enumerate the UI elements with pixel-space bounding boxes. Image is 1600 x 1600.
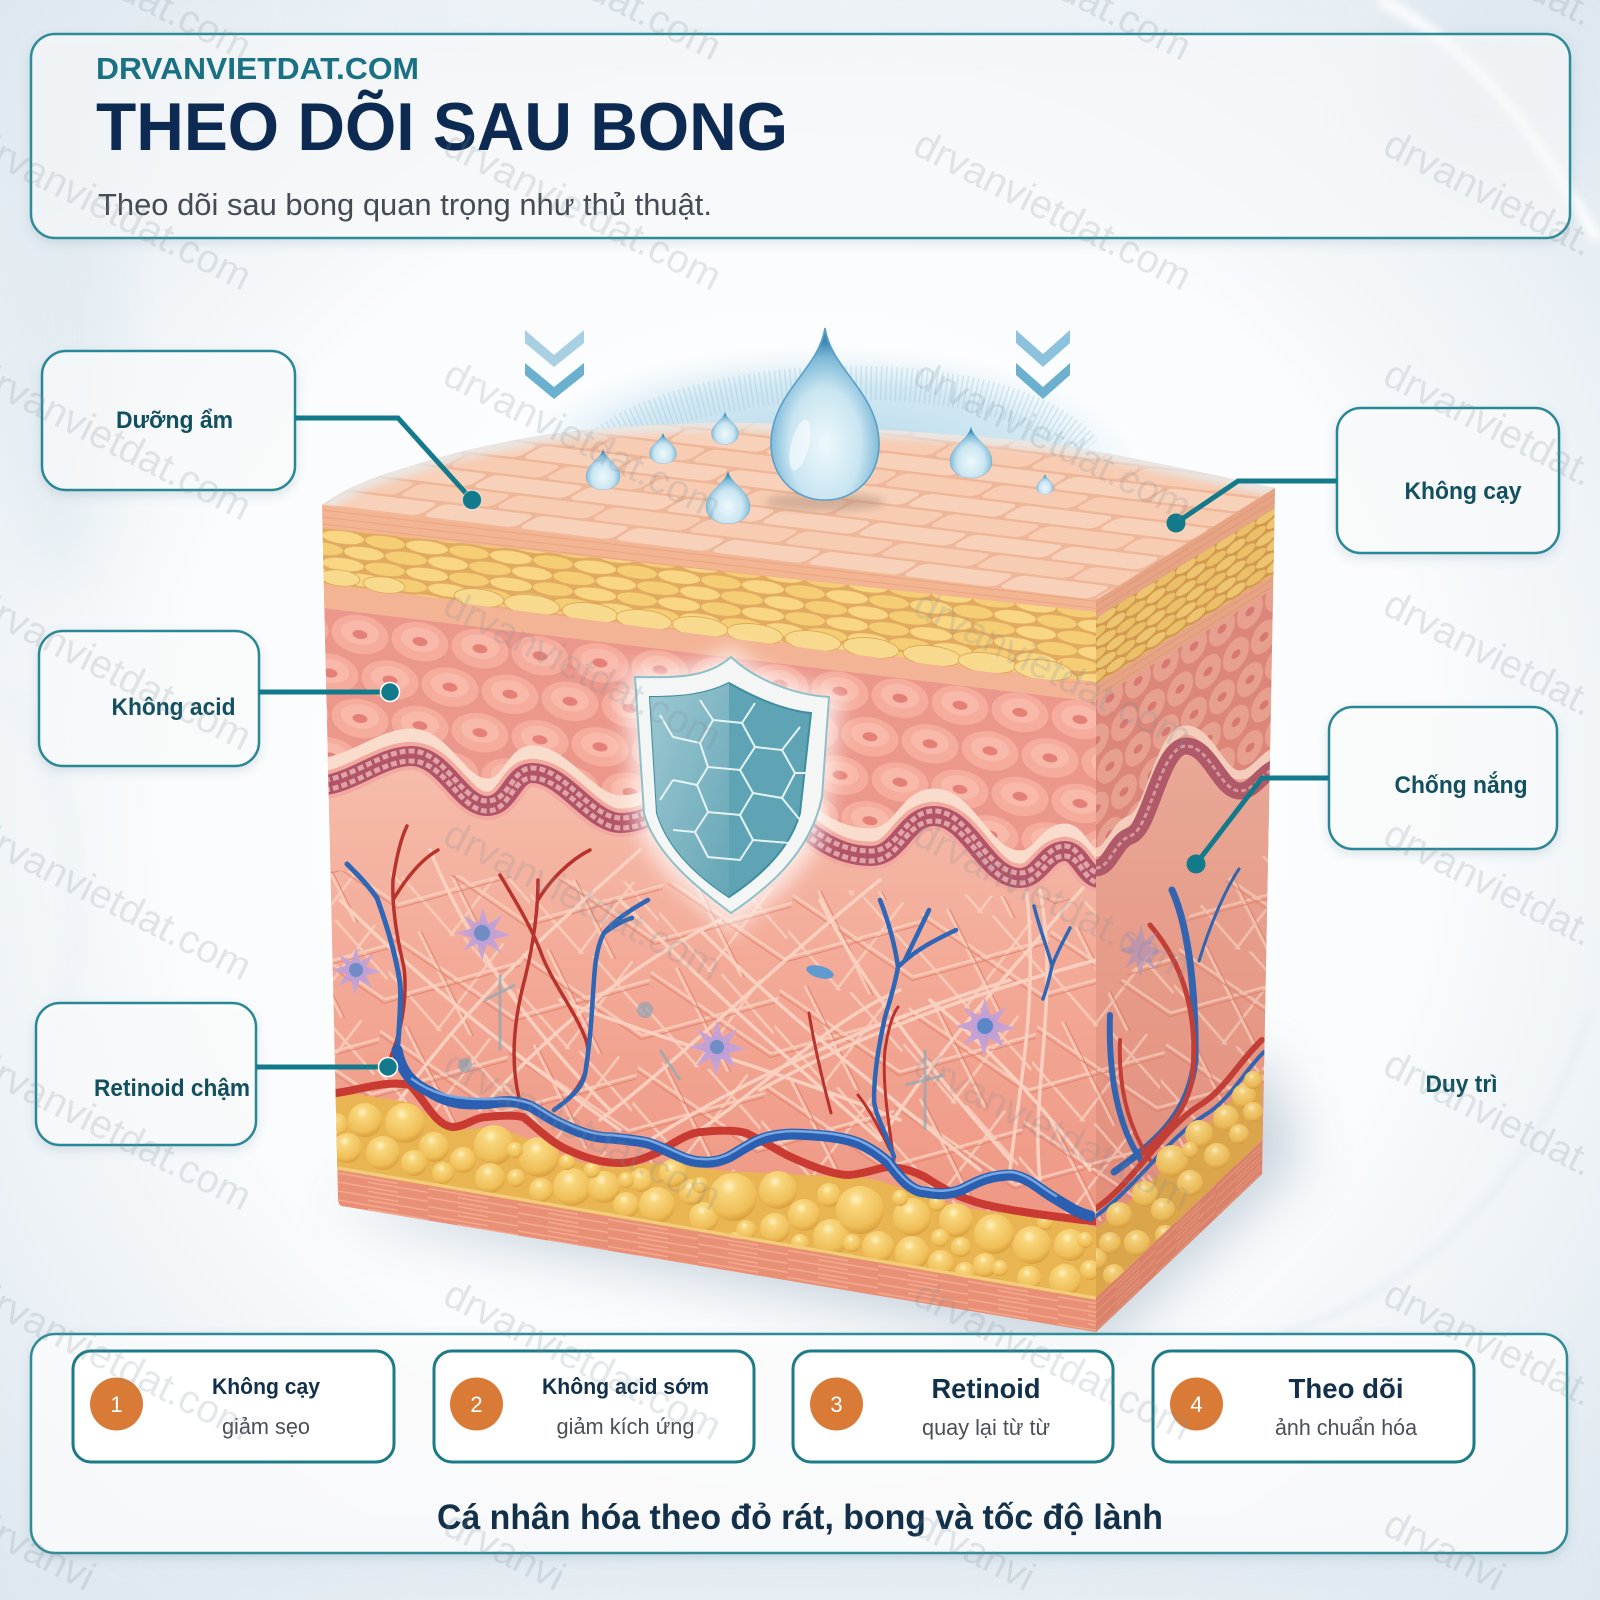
- callout: Dưỡng ẩm: [42, 351, 482, 510]
- watermark grid: drvanvietdat.: [1377, 122, 1600, 265]
- arteries: [336, 1084, 1100, 1222]
- watermark grid: drvanvietdat.com: [907, 352, 1198, 529]
- panel: header: [31, 34, 1570, 238]
- step 2: Không acid sớm: [542, 1374, 709, 1399]
- callout: Retinoid chậm: [36, 1003, 398, 1145]
- brand url: DRVANVIETDAT.COM: [96, 51, 419, 86]
- icon: protective shield: [622, 645, 842, 932]
- watermark grid: drvanvietdat.com: [907, 582, 1198, 759]
- title: THEO DÕI SAU BONG: [96, 88, 788, 165]
- skin block illustration: [315, 415, 1280, 1340]
- step 2: 2: [470, 1392, 483, 1417]
- yellow granular layer: [322, 528, 1096, 682]
- horny layer: [320, 500, 1100, 700]
- watermark grid: drvanvietdat.com: [907, 1272, 1198, 1449]
- watermark grid: drvanvi: [907, 1502, 1042, 1600]
- callout: Không acid: Không acid: [112, 694, 236, 721]
- icon: chevron arrows right: [1016, 330, 1070, 399]
- watermark grid: drvanvietdat.com: [437, 582, 728, 759]
- callout: Không cạy: Không cạy: [1404, 478, 1522, 505]
- right face purple cell: [1119, 924, 1163, 978]
- watermark grid: drvanvietdat.com: [437, 1272, 728, 1449]
- right face of block: [1085, 480, 1280, 1340]
- callout: Không cạy: [1166, 408, 1559, 553]
- callout: Chống nắng: Chống nắng: [1394, 771, 1528, 799]
- blood vessels: [324, 826, 1100, 1310]
- step 2: giảm kích ứng: [556, 1414, 694, 1439]
- watermark grid: drvanvietdat.: [1377, 352, 1600, 495]
- callout: Chống nắng: [1186, 707, 1557, 874]
- watermark grid: drvanvietdat.com: [907, 1042, 1198, 1219]
- lower fascia stripes: [338, 1170, 1096, 1340]
- watermark grid: drvanvietdat.com: [437, 352, 728, 529]
- honeycomb: [660, 700, 808, 860]
- watermark grid: drvanvietdat.com: [437, 122, 728, 299]
- step 1: 1: [110, 1392, 123, 1417]
- watermark grid: drvanvietdat.: [1377, 1042, 1600, 1185]
- glow dome behind drops: [505, 345, 1145, 595]
- step 1: [73, 1351, 394, 1462]
- watermark grid: drvanvietdat.: [1377, 582, 1600, 725]
- right face vessels: [1090, 869, 1264, 1220]
- watermark grid: drvanvietdat.com: [907, 122, 1198, 299]
- icon: chevron arrows left: [525, 330, 584, 399]
- step 1: giảm sẹo: [222, 1414, 310, 1439]
- callout: Dưỡng ẩm: Dưỡng ẩm: [116, 407, 233, 434]
- callout: Retinoid chậm: Retinoid chậm: [94, 1075, 250, 1102]
- step 1: Không cạy: [212, 1374, 321, 1399]
- icon: water drops: [586, 328, 1054, 524]
- step 4: [1153, 1351, 1474, 1462]
- watermark grid: drvanvi: [1377, 1502, 1512, 1600]
- step 4: Theo dõi: [1288, 1373, 1404, 1404]
- watermark grid: drvanvietdat.com: [437, 812, 728, 989]
- step 3: [793, 1351, 1113, 1462]
- step 2: [434, 1351, 754, 1462]
- subtitle: Theo dõi sau bong quan trọng như thủ thuật.: [98, 187, 712, 222]
- veins: [347, 864, 401, 1059]
- watermark grid: drvanvietdat.: [1377, 812, 1600, 955]
- fat tissue: [330, 1090, 1100, 1310]
- step 3: 3: [830, 1392, 843, 1417]
- ground shadow: [330, 1060, 1300, 1350]
- callout: Duy trì: Duy trì: [1426, 1071, 1498, 1098]
- watermark grid: drvanvi: [437, 1502, 572, 1600]
- watermark grid: drvanvietdat.: [1377, 1272, 1600, 1415]
- step 3: Retinoid: [932, 1373, 1040, 1404]
- epidermis cells: [322, 608, 1096, 870]
- basement membrane wave: [315, 735, 1100, 883]
- watermark grid: drvanvietdat.com: [907, 812, 1198, 989]
- step 4: 4: [1190, 1392, 1203, 1417]
- callout: Không acid: [39, 631, 400, 766]
- purple dendritic cells: [332, 907, 1016, 1130]
- thin peach stripe: [322, 585, 1096, 702]
- dermis: [315, 730, 1100, 1340]
- panel: timeline steps: [31, 1334, 1567, 1553]
- step 3: quay lại từ từ: [922, 1415, 1050, 1440]
- front face of block: [315, 500, 1100, 1340]
- step 4: ảnh chuẩn hóa: [1275, 1415, 1418, 1440]
- closing message: Cá nhân hóa theo đỏ rát, bong và tốc độ lành: [437, 1498, 1163, 1537]
- top surface of skin: [320, 415, 1280, 605]
- watermark grid: drvanvietdat.com: [437, 1042, 728, 1219]
- collagen fibres: [322, 850, 1100, 1240]
